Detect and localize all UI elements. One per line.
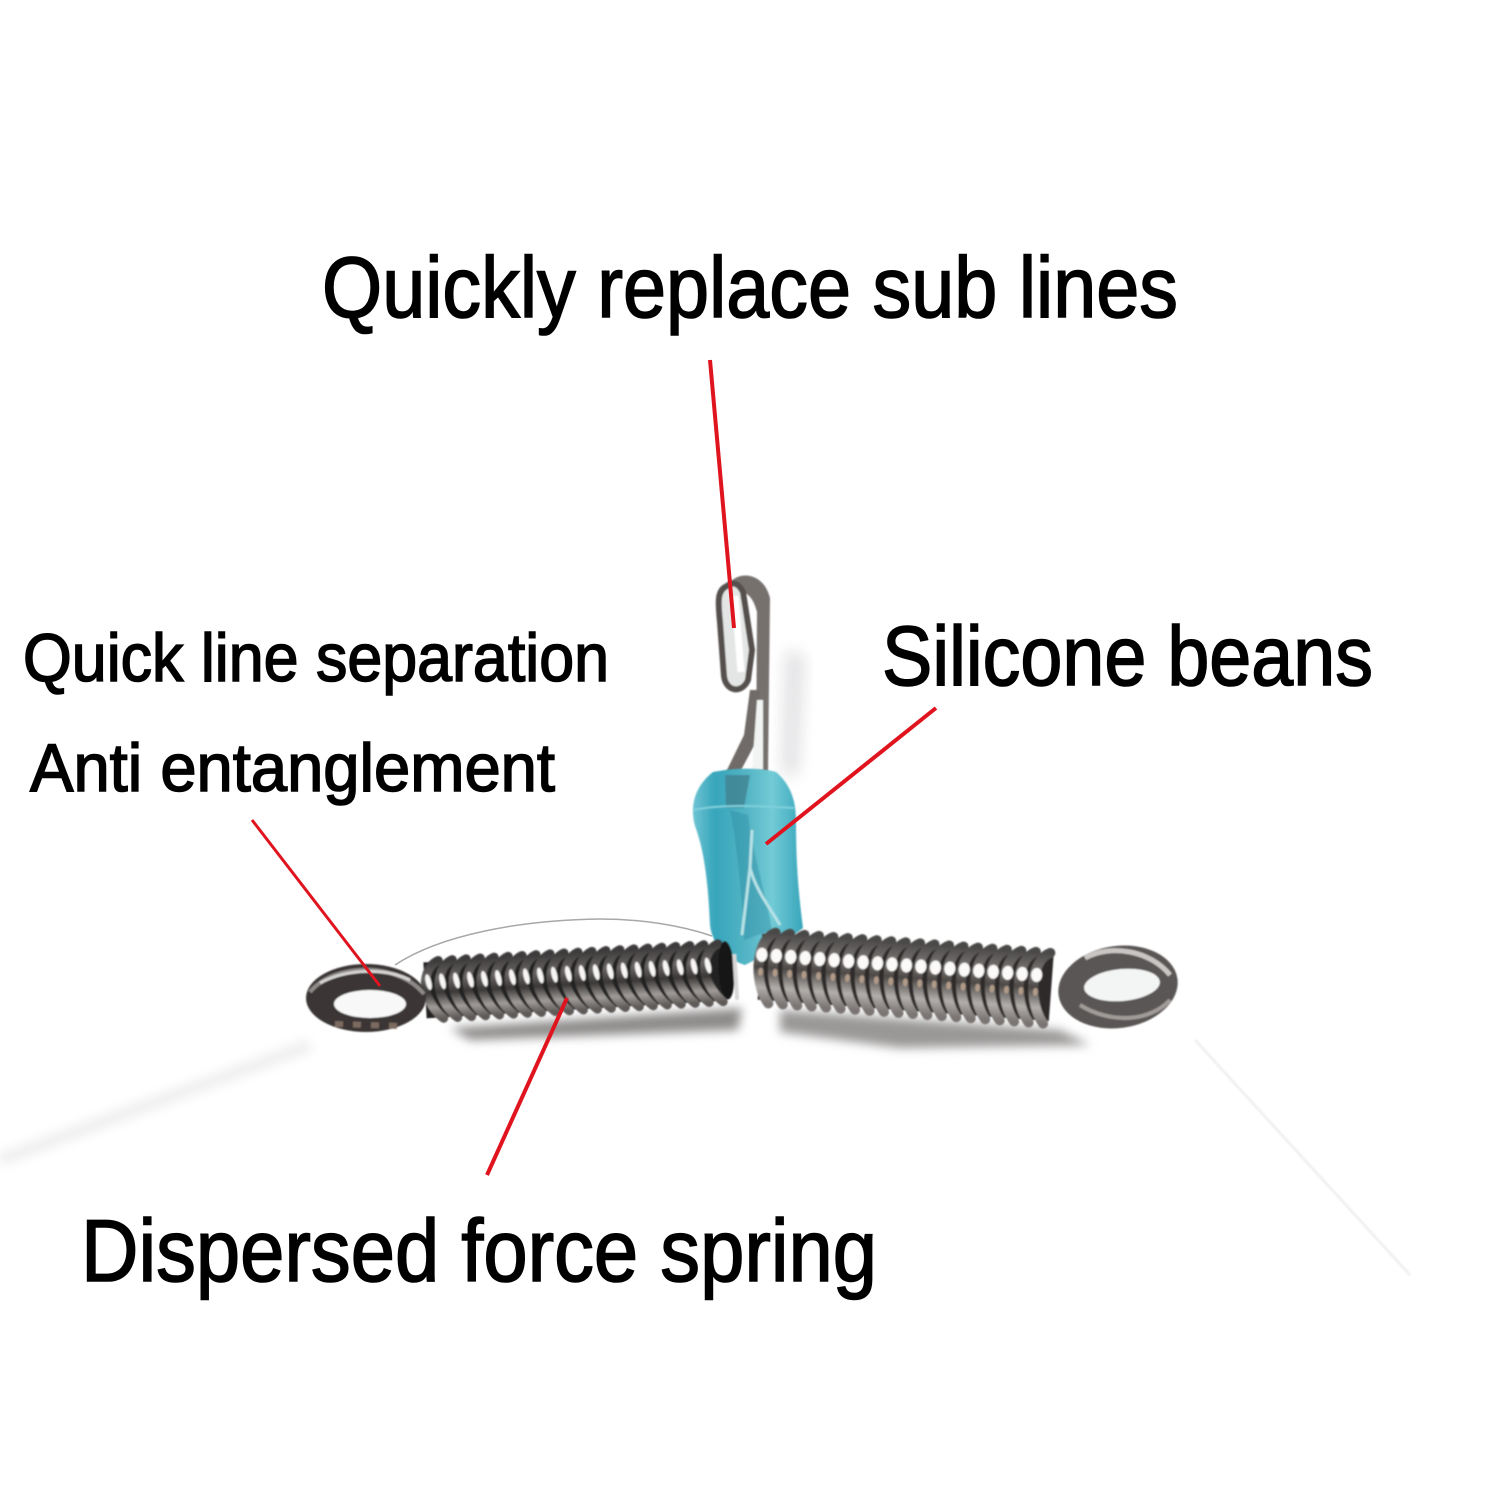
photo: right spring shadow bbox=[780, 1010, 1090, 1048]
photo: snap clip bbox=[719, 575, 804, 775]
leader line: sub lines bbox=[710, 360, 734, 628]
photo: left split ring bbox=[306, 964, 426, 1032]
photo: silicone bead bbox=[693, 769, 803, 965]
heading: Quickly replace sub lines: Quickly replace sub lines bbox=[322, 240, 1178, 336]
photo: right split ring bbox=[1053, 938, 1183, 1036]
label: Anti entanglement: Anti entanglement bbox=[30, 730, 555, 806]
photo: left spring shadow bbox=[450, 1008, 742, 1040]
leader line: spring bbox=[487, 998, 567, 1175]
photo: left spring bbox=[423, 941, 737, 1019]
photo: right spring bbox=[753, 931, 1054, 1024]
label: Silicone beans: Silicone beans bbox=[882, 609, 1373, 703]
label: Quick line separation: Quick line separation bbox=[23, 620, 609, 696]
photo: monofilament line bbox=[395, 919, 712, 965]
leader line: ring bbox=[252, 820, 380, 986]
leader line: silicone beans bbox=[766, 708, 936, 844]
label: Dispersed force spring: Dispersed force spring bbox=[81, 1201, 877, 1300]
